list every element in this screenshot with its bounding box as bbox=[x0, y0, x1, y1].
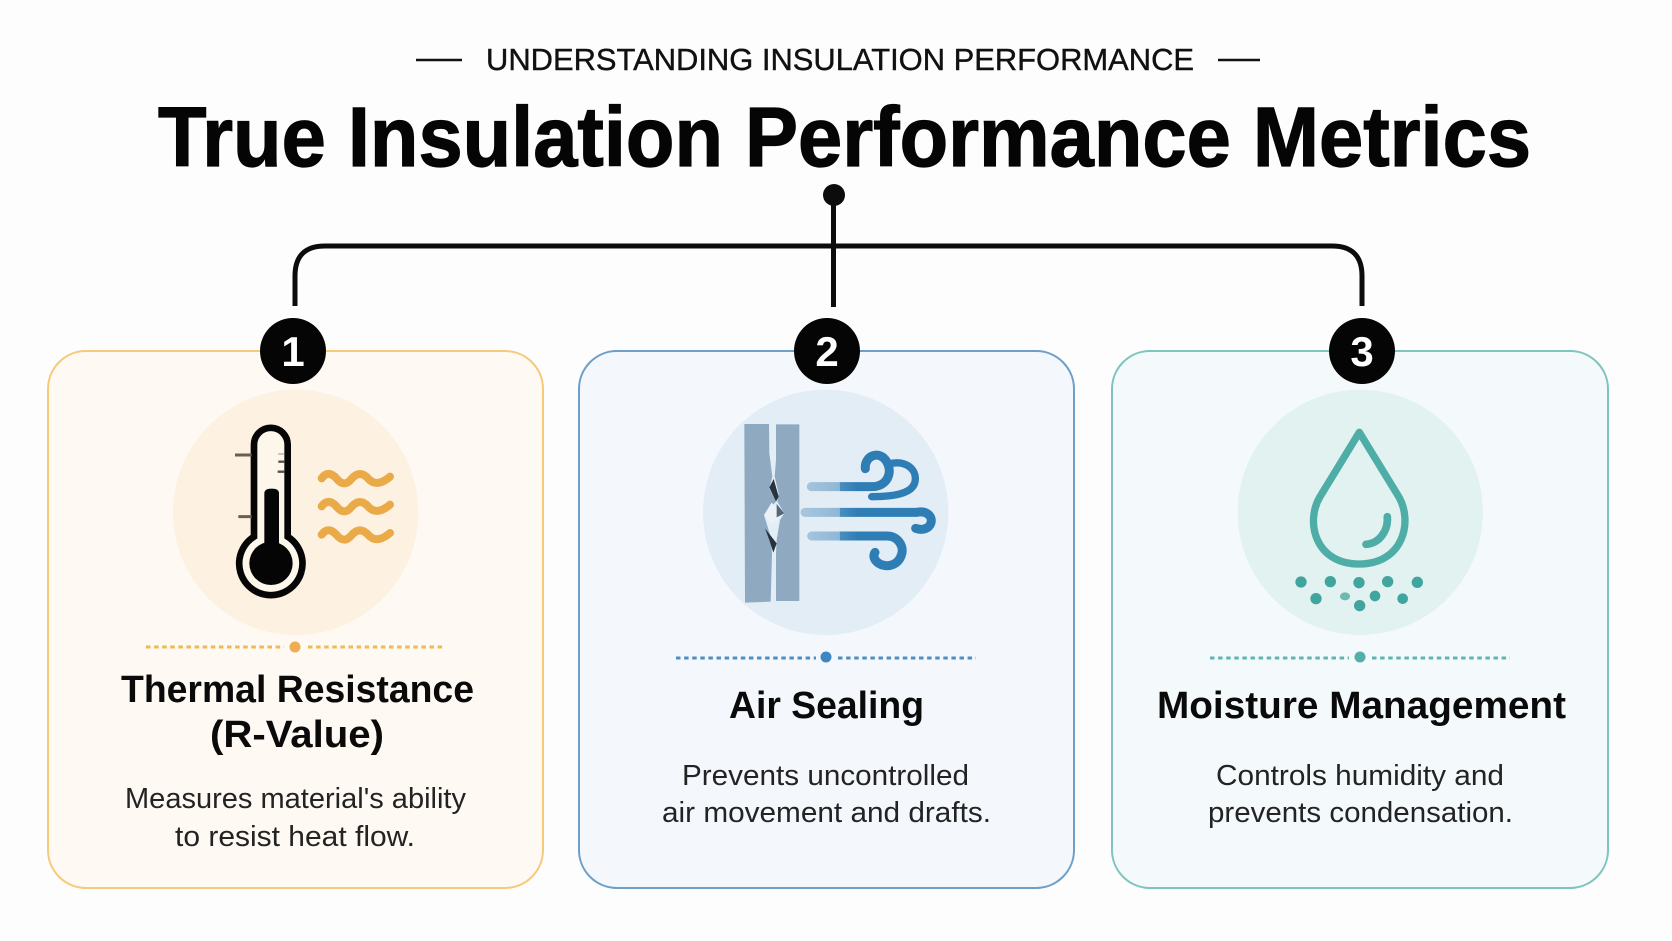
divider bbox=[146, 642, 445, 652]
description: moisture management: prevents condensation. bbox=[1208, 797, 1513, 829]
number badge 1: 1 bbox=[281, 328, 305, 375]
icon: thermometer with heat waves bbox=[173, 390, 418, 635]
eyebrow heading: UNDERSTANDING INSULATION PERFORMANCE bbox=[486, 42, 1194, 77]
description: thermal resistance: to resist heat flow. bbox=[175, 821, 415, 853]
description: moisture management bbox=[1208, 760, 1513, 829]
description: air sealing: air movement and drafts. bbox=[662, 797, 991, 829]
number badge 2: 2 bbox=[815, 328, 839, 375]
divider bbox=[1210, 652, 1510, 662]
divider bbox=[676, 652, 976, 662]
description: air sealing: Prevents uncontrolled bbox=[682, 760, 969, 792]
description: thermal resistance bbox=[125, 783, 466, 853]
connector tree bbox=[295, 184, 1362, 307]
description: air sealing bbox=[662, 760, 991, 829]
icon: cracked wall with wind bbox=[703, 390, 948, 635]
description: moisture management: Controls humidity and bbox=[1216, 760, 1504, 792]
description: thermal resistance: Measures material's ability bbox=[125, 783, 466, 815]
number badge 3: 3 bbox=[1350, 328, 1374, 375]
title: True Insulation Performance Metrics bbox=[158, 90, 1531, 184]
heading: thermal resistance: (R-Value) bbox=[210, 714, 384, 756]
panel: thermal resistance bbox=[48, 351, 543, 888]
number badge 1 bbox=[260, 318, 326, 384]
number badge 3 bbox=[1329, 318, 1395, 384]
panel: air sealing bbox=[579, 351, 1074, 888]
heading: air sealing: Air Sealing bbox=[729, 685, 924, 727]
panel: moisture management bbox=[1112, 351, 1608, 888]
heading: thermal resistance: Thermal Resistance bbox=[121, 669, 474, 711]
number badge 2 bbox=[794, 318, 860, 384]
heading: moisture management: Moisture Management bbox=[1157, 685, 1566, 727]
icon: water drop with droplets bbox=[1238, 390, 1483, 635]
heading: thermal resistance bbox=[121, 669, 474, 756]
